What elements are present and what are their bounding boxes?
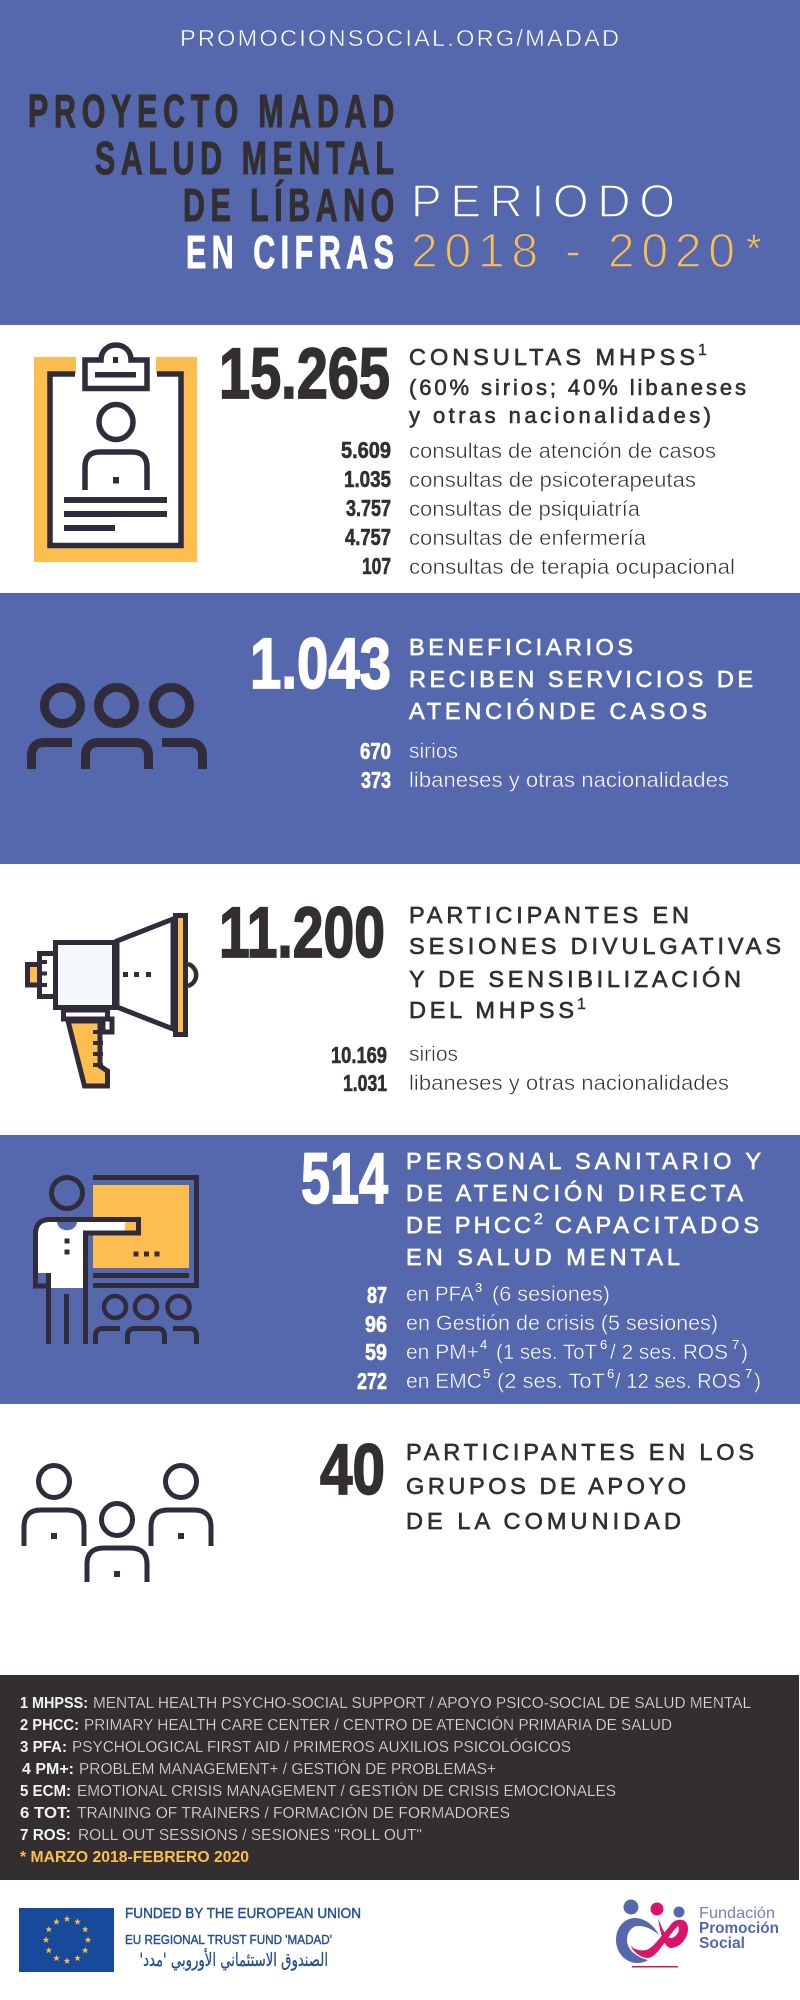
panel: personal sanitario	[0, 1135, 800, 1404]
foundation name: Fundación	[699, 1905, 775, 1922]
breakdown rows: libaneses y otras nacionalidades	[409, 769, 729, 792]
stat: 1.043: 1.043	[250, 625, 391, 704]
breakdown rows: 6	[600, 1337, 607, 1352]
heading: personal sanitario: EN SALUD MENTAL	[406, 1244, 680, 1270]
footnote 5: 5 ECM:	[20, 1783, 71, 1800]
icon: EU flag	[19, 1908, 114, 1972]
icon: clipboard with person	[34, 345, 197, 562]
panel: participantes sesiones	[28, 894, 781, 1096]
foundation name: Promoción	[699, 1920, 779, 1937]
heading: personal sanitario: PERSONAL SANITARIO Y	[406, 1148, 761, 1174]
footnote 4: 4 PM+:	[22, 1761, 74, 1778]
breakdown rows: libaneses y otras nacionalidades	[409, 1072, 729, 1095]
breakdown rows: )	[754, 1370, 761, 1393]
heading: beneficiarios: ATENCIÓNDE CASOS	[409, 698, 707, 724]
period years: *	[746, 227, 762, 271]
panel: footnotes	[0, 1675, 799, 1880]
heading: participantes sesiones: PARTICIPANTES EN	[409, 902, 689, 928]
breakdown rows: en EMC	[406, 1370, 482, 1393]
icon: three people	[32, 688, 202, 769]
breakdown rows: sirios	[409, 740, 458, 763]
heading: grupos de apoyo: DE LA COMUNIDAD	[406, 1508, 681, 1534]
heading: participantes sesiones: DEL MHPSS	[409, 997, 574, 1023]
breakdown rows	[360, 738, 729, 793]
breakdown rows: sirios	[409, 1043, 458, 1066]
breakdown rows: 87	[367, 1282, 387, 1308]
footnote 5: EMOTIONAL CRISIS MANAGEMENT / GESTIÓN DE CRISIS EMOCIONALES	[77, 1781, 616, 1800]
website url: PROMOCIONSOCIAL.ORG/MADAD	[180, 25, 619, 51]
heading: participantes sesiones	[409, 902, 781, 1023]
breakdown rows: 7	[732, 1337, 739, 1352]
EU funding text: EU REGIONAL TRUST FUND 'MADAD'	[125, 1932, 332, 1947]
period label: PERIODO	[411, 175, 675, 227]
footnote 7: 7 ROS:	[20, 1827, 71, 1844]
EU funding text: FUNDED BY THE EUROPEAN UNION	[125, 1905, 361, 1922]
breakdown rows: 4.757	[345, 524, 391, 550]
breakdown rows: (1 ses. ToT	[496, 1341, 597, 1364]
breakdown rows: / 12 ses. ROS	[615, 1370, 741, 1393]
breakdown rows: consultas de psiquiatría	[409, 498, 640, 521]
breakdown rows: 107	[362, 553, 391, 579]
footnote date: * MARZO 2018-FEBRERO 2020	[20, 1849, 249, 1866]
heading: beneficiarios: RECIBEN SERVICIOS DE	[409, 666, 753, 692]
breakdown rows: 3	[475, 1280, 482, 1295]
breakdown rows: en PM+	[406, 1341, 479, 1364]
breakdown rows: 1.031	[343, 1070, 387, 1096]
panel: EU funding logo	[19, 1905, 361, 1972]
heading: participantes sesiones: SESIONES DIVULGATIVAS	[409, 933, 781, 959]
footnote 1: 1 MHPSS:	[20, 1695, 88, 1712]
breakdown rows: 59	[365, 1339, 387, 1365]
footnote 2: 2 PHCC:	[20, 1717, 79, 1734]
heading: consultas: 1	[698, 342, 707, 359]
heading: personal sanitario: DE ATENCIÓN DIRECTA	[406, 1180, 743, 1206]
period years: 2018 - 2020	[411, 225, 735, 278]
breakdown rows: / 2 ses. ROS	[610, 1341, 728, 1364]
breakdown rows: 96	[365, 1311, 387, 1337]
foundation name: Social	[699, 1935, 745, 1952]
panel: header	[0, 0, 800, 325]
heading: participantes sesiones: 1	[577, 996, 586, 1013]
title	[28, 87, 394, 279]
heading: consultas	[409, 342, 746, 428]
heading: grupos de apoyo: PARTICIPANTES EN LOS	[406, 1439, 754, 1465]
breakdown rows: 7	[745, 1366, 752, 1381]
panel: consultas	[34, 335, 746, 579]
title: DE LÍBANO	[183, 180, 394, 232]
breakdown rows: consultas de terapia ocupacional	[409, 556, 735, 579]
breakdown rows	[341, 437, 735, 579]
EU funding text: الصندوق الاستئماني الأوروبي 'مدد'	[139, 1948, 328, 1972]
breakdown rows: (6 sesiones)	[492, 1283, 610, 1306]
title: PROYECTO MADAD	[28, 87, 394, 138]
heading: beneficiarios: BENEFICIARIOS	[409, 634, 633, 660]
stat: 15.265: 15.265	[219, 335, 390, 414]
stat: 40: 40	[320, 1431, 385, 1510]
heading: personal sanitario: 2	[534, 1211, 543, 1228]
breakdown rows: en PFA	[406, 1283, 474, 1306]
heading: personal sanitario: DE PHCC	[406, 1212, 531, 1238]
icon: foundation symbol	[616, 1900, 688, 1968]
icon: presenter at board	[36, 1178, 196, 1344]
breakdown rows: 373	[361, 767, 391, 793]
breakdown rows: )	[741, 1341, 748, 1364]
footnote 4: PROBLEM MANAGEMENT+ / GESTIÓN DE PROBLEMAS+	[79, 1759, 496, 1778]
heading: grupos de apoyo: GRUPOS DE APOYO	[406, 1473, 686, 1499]
footnote 3: 3 PFA:	[20, 1739, 67, 1756]
title: EN CIFRAS	[186, 228, 394, 279]
breakdown rows	[357, 1280, 761, 1394]
heading: grupos de apoyo	[406, 1439, 754, 1534]
panel: Fundación Promoción Social logo	[616, 1900, 779, 1968]
footnote 2: PRIMARY HEALTH CARE CENTER / CENTRO DE ATENCIÓN PRIMARIA DE SALUD	[84, 1715, 672, 1734]
icon: group of three people	[24, 1466, 211, 1582]
footnote 3: PSYCHOLOGICAL FIRST AID / PRIMEROS AUXILIOS PSICOLÓGICOS	[72, 1737, 571, 1756]
EU funding text	[125, 1905, 361, 1972]
breakdown rows: consultas de psicoterapeutas	[409, 469, 696, 492]
breakdown rows: 10.169	[331, 1042, 387, 1068]
breakdown rows: 6	[607, 1366, 614, 1381]
heading: participantes sesiones: Y DE SENSIBILIZACIÓN	[409, 966, 741, 992]
foundation name	[699, 1905, 779, 1952]
title: SALUD MENTAL	[95, 134, 394, 185]
footnote 1: MENTAL HEALTH PSYCHO-SOCIAL SUPPORT / APOYO PSICO-SOCIAL DE SALUD MENTAL	[93, 1695, 751, 1712]
breakdown rows	[331, 1042, 729, 1096]
breakdown rows: en Gestión de crisis (5 sesiones)	[406, 1312, 718, 1335]
panel: grupos de apoyo	[24, 1431, 754, 1582]
footnote 7: ROLL OUT SESSIONS / SESIONES "ROLL OUT"	[78, 1827, 422, 1844]
breakdown rows: consultas de enfermería	[409, 527, 646, 550]
breakdown rows: 272	[357, 1368, 387, 1394]
footnote 6: TRAINING OF TRAINERS / FORMACIÓN DE FORMADORES	[77, 1803, 510, 1822]
stat: 514: 514	[301, 1140, 388, 1219]
heading: consultas: y otras nacionalidades)	[409, 403, 711, 428]
heading: personal sanitario: CAPACITADOS	[555, 1212, 759, 1238]
heading: consultas: CONSULTAS MHPSS	[409, 344, 695, 370]
panel: beneficiarios	[0, 593, 800, 864]
breakdown rows: 4	[480, 1337, 487, 1352]
breakdown rows: (2 ses. ToT	[497, 1370, 605, 1393]
heading: consultas: (60% sirios; 40% libaneses	[409, 375, 746, 400]
footnote 6: 6 TOT:	[20, 1805, 71, 1822]
breakdown rows: 670	[360, 738, 391, 764]
heading: personal sanitario	[406, 1148, 761, 1270]
breakdown rows: consultas de atención de casos	[409, 440, 716, 463]
heading: beneficiarios	[409, 634, 753, 724]
breakdown rows: 5	[483, 1366, 490, 1381]
breakdown rows: 1.035	[344, 466, 391, 492]
breakdown rows: 3.757	[346, 495, 391, 521]
icon: megaphone	[28, 916, 196, 1086]
breakdown rows: 5.609	[341, 437, 391, 463]
stat: 11.200: 11.200	[219, 894, 385, 973]
